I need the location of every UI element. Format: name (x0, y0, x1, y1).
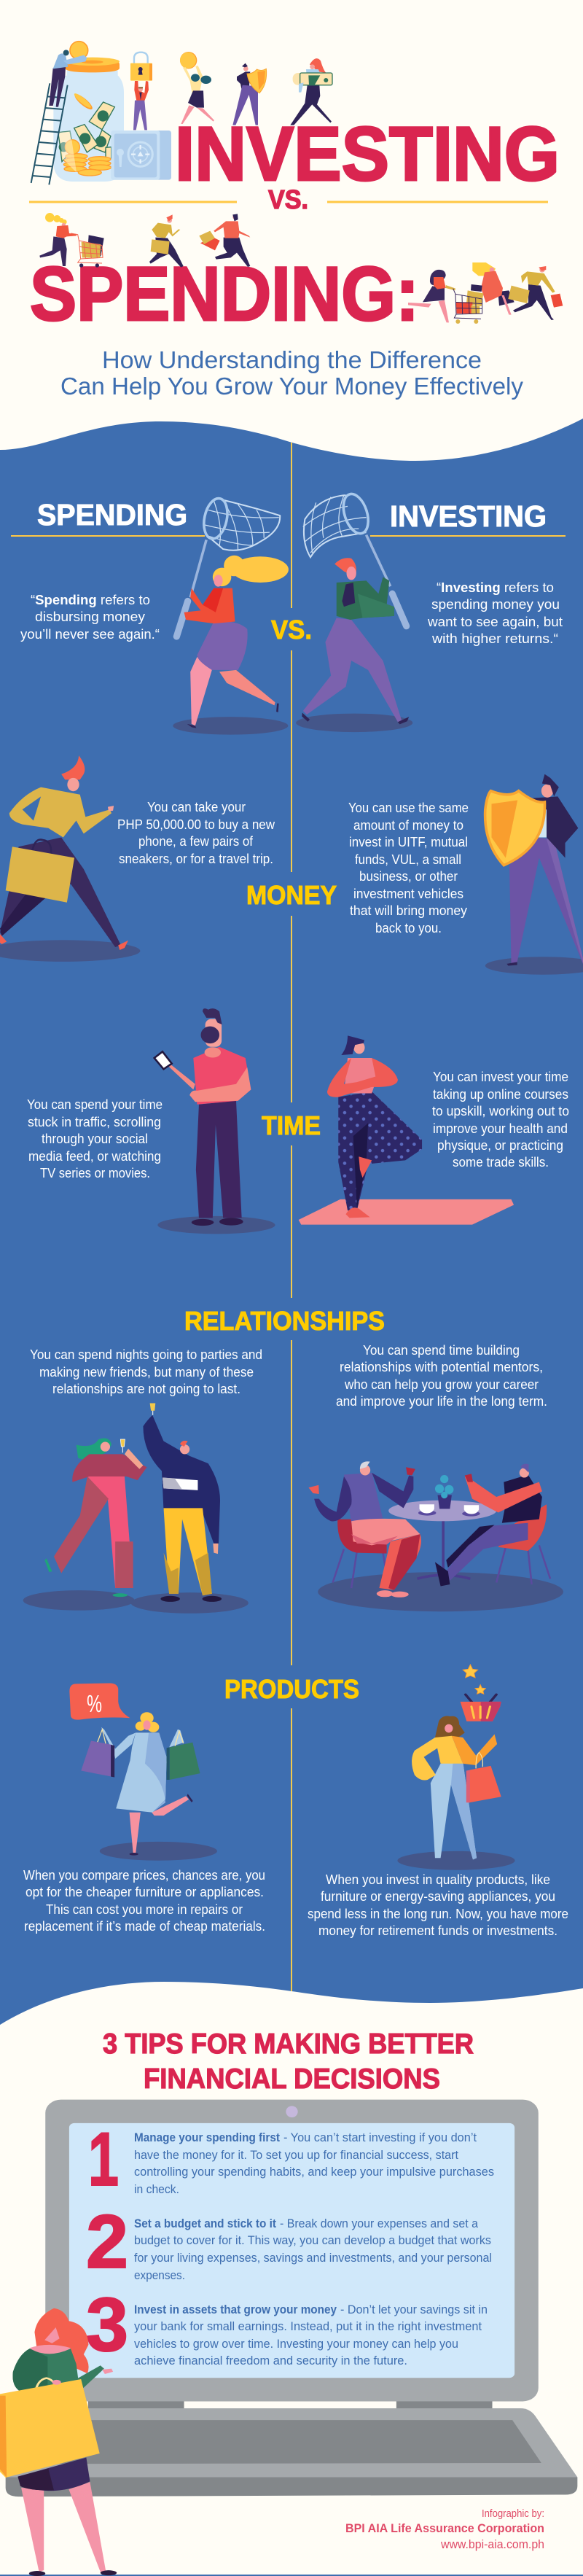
text: investing time: taking up online courses (433, 1087, 568, 1102)
tip 1: Manage your spending first (134, 2131, 280, 2144)
definition: investing: spending money you (431, 597, 560, 612)
text: investing products: When you invest in quality products, like (326, 1872, 550, 1887)
illustration: three investors walking on the title (180, 52, 332, 125)
tip 3: vehicles to grow over time. Investing your money can help you (134, 2338, 458, 2351)
text: investing time: to upskill, working out to (432, 1104, 569, 1118)
heading: 3 tips (103, 2028, 474, 2095)
text: investing money: back to you. (375, 921, 442, 935)
text: investing money: that will bring money (350, 903, 467, 918)
text: spending money: You can take your (147, 800, 246, 814)
icon: percent sign: % (87, 1690, 102, 1717)
credits: www.bpi-aia.com.ph (440, 2537, 544, 2551)
tip numbers (86, 2117, 128, 2367)
definition: investing: with higher returns.“ (431, 631, 558, 646)
text: investing relationships: relationships with potential mentors, (340, 1360, 543, 1374)
illustration: man looking at phone (154, 1008, 275, 1234)
credits (345, 2507, 544, 2551)
text: investing products (308, 1872, 568, 1938)
text: investing money: investment vehicles (353, 887, 463, 901)
section heading: SPENDING: SPENDING (37, 498, 187, 532)
text: investing money: amount of money to (353, 818, 463, 833)
tip 2: - Break down your expenses and set a (280, 2217, 479, 2230)
tip 1: in check. (134, 2183, 179, 2196)
tip 2: expenses. (134, 2269, 185, 2282)
text: spending products (23, 1868, 265, 1934)
text: investing money: business, or other (359, 869, 458, 884)
tip 3 (134, 2303, 488, 2367)
tip 1: controlling your spending habits, and keep your impulsive purchases (134, 2166, 494, 2179)
illustration: shoppers with cart right of the title (408, 262, 563, 324)
definition: investing: want to see again, but (427, 615, 563, 629)
text: spending money: sneakers, or for a travel trip. (119, 852, 273, 866)
text: investing relationships (336, 1343, 547, 1409)
subtitle: Can Help You Grow Your Money Effectively (60, 373, 523, 400)
credits: BPI AIA Life Assurance Corporation (345, 2521, 544, 2535)
text: spending products: This can cost you more in repairs or (46, 1902, 243, 1917)
text: investing time: some trade skills. (453, 1155, 549, 1170)
text: investing relationships: and improve your life in the long term. (336, 1394, 547, 1409)
tip 2 (134, 2217, 492, 2282)
text: spending money: phone, a few pairs of (138, 834, 254, 849)
text: spending time: media feed, or watching (28, 1149, 161, 1164)
illustration: woman with yellow bag (0, 2308, 117, 2576)
definition: spending: you’ll never see again.“ (20, 627, 160, 642)
tip 3: - Don’t let your savings sit in (340, 2303, 488, 2316)
tip 1: have the money for it. To set you up for financial success, start (134, 2149, 458, 2162)
title: INVESTING: INVESTING (175, 112, 560, 197)
text: spending time: stuck in traffic, scrolling (28, 1115, 161, 1129)
text: investing time: physique, or practicing (437, 1138, 563, 1153)
text: spending relationships: relationships are not going to last. (52, 1382, 240, 1396)
illustration: woman with quality products and basket (397, 1665, 515, 1870)
illustration: shoppers above SPENDING (39, 213, 250, 268)
tip 2: for your living expenses, savings and investments, and your personal (134, 2252, 492, 2265)
tip 3: your bank for small earnings. Instead, put it in the right investment (134, 2320, 482, 2333)
heading: 3 tips: 3 TIPS FOR MAKING BETTER (103, 2028, 474, 2060)
text: investing money: You can use the same (348, 801, 469, 815)
definition: spending (20, 593, 160, 642)
tip numbers: 2 (86, 2200, 128, 2284)
tip 3: Invest in assets that grow your money (134, 2303, 337, 2316)
illustration: mentors at cafe table (308, 1461, 563, 1611)
text: spending time: You can spend your time (27, 1097, 163, 1112)
title: SPENDING: SPENDING: (30, 252, 419, 337)
tip 1 (134, 2131, 494, 2196)
tip 3: achieve financial freedom and security in the future. (134, 2354, 407, 2367)
text: investing products: money for retirement funds or investments. (318, 1923, 557, 1938)
title: vs.: VS. (268, 184, 308, 214)
text: investing time: improve your health and (433, 1121, 568, 1136)
text: investing money: invest in UITF, mutual (349, 835, 468, 849)
illustration: yoga woman on mat (299, 1035, 514, 1225)
text: spending relationships: You can spend nights going to parties and (30, 1347, 262, 1362)
label: RELATIONSHIPS: RELATIONSHIPS (184, 1306, 385, 1336)
tip 1: - You can’t start investing if you don’t (283, 2131, 477, 2144)
definition: investing (427, 580, 563, 646)
illustration: spending man with bag (0, 755, 140, 962)
text: investing time (432, 1070, 569, 1170)
text: spending money: PHP 50,000.00 to buy a new (117, 817, 275, 832)
text: investing products: furniture or energy-saving appliances, you (321, 1889, 555, 1904)
definition: spending: disbursing money (35, 610, 145, 624)
illustration: laptop (6, 2100, 577, 2497)
text: investing money: funds, VUL, a small (355, 852, 461, 867)
text: investing relationships: You can spend time building (363, 1343, 520, 1358)
tip numbers: 3 (86, 2283, 128, 2367)
text: spending products: opt for the cheaper furniture or appliances. (26, 1885, 264, 1899)
illustration: spending woman with net (173, 497, 289, 735)
definition: investing: “Investing refers to (437, 580, 554, 595)
text: investing products: spend less in the long run. Now, you have more (308, 1907, 568, 1921)
blue wave panel (0, 419, 583, 2025)
subtitle: How Understanding the Difference (102, 346, 482, 373)
text: investing relationships: who can help you grow your career (344, 1377, 539, 1392)
label: MONEY: MONEY (246, 880, 337, 910)
illustration: money jar, ladder, climber, padlock and safe (31, 42, 171, 184)
subtitle (60, 346, 523, 400)
label: PRODUCTS: PRODUCTS (224, 1674, 359, 1704)
text: spending products: replacement if it’s made of cheap materials. (24, 1919, 265, 1934)
text: spending relationships: making new friends, but many of these (39, 1365, 254, 1380)
section heading: INVESTING: INVESTING (390, 499, 547, 533)
heading: 3 tips: FINANCIAL DECISIONS (144, 2063, 440, 2095)
text: spending time: through your social (42, 1132, 148, 1146)
illustration: woman shopping with discount bubble (69, 1683, 217, 1861)
illustration: investing man with shield (485, 774, 583, 975)
label: TIME: TIME (262, 1110, 321, 1140)
illustration: investing man with net (296, 491, 412, 732)
credits: Infographic by: (482, 2507, 544, 2520)
text: spending time: TV series or movies. (40, 1166, 150, 1180)
text: spending money (117, 800, 275, 866)
text: investing money (348, 801, 469, 935)
definition: spending: “Spending refers to (31, 593, 150, 607)
tip 2: Set a budget and stick to it (134, 2217, 276, 2230)
text: spending relationships (30, 1347, 262, 1396)
text: spending time (27, 1097, 163, 1180)
illustration: party couple (23, 1403, 249, 1614)
text: investing time: You can invest your time (433, 1070, 568, 1084)
label: VS.: VS. (271, 615, 312, 645)
tip numbers: 1 (88, 2117, 119, 2202)
text: spending products: When you compare prices, chances are, you (23, 1868, 265, 1883)
tip 2: budget to cover for it. This way, you can develop a budget that works (134, 2234, 491, 2247)
